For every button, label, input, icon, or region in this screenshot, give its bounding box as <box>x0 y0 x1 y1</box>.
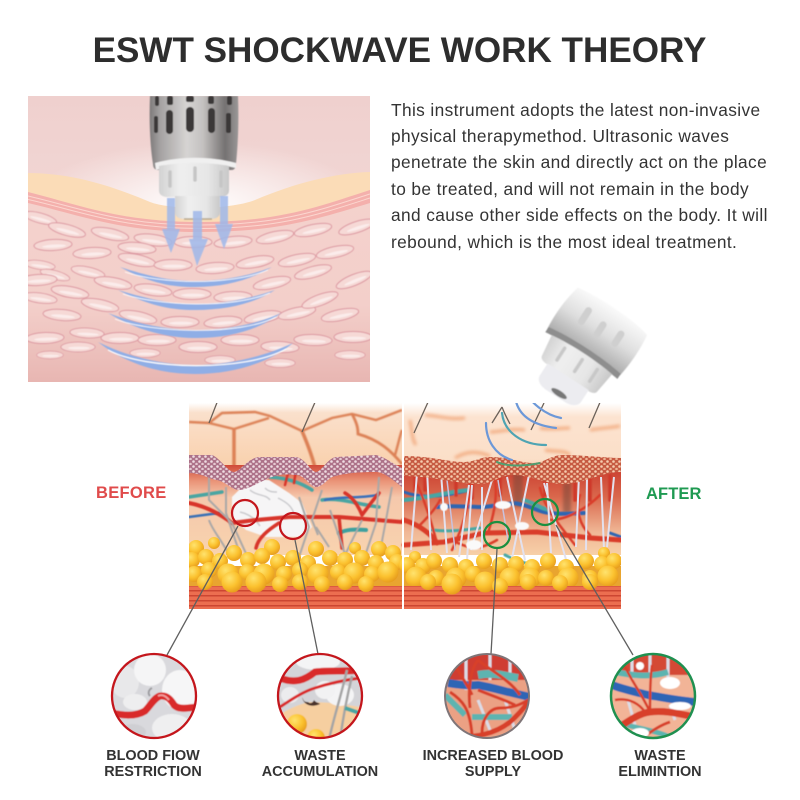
skin fat band <box>28 172 370 235</box>
left fibres <box>209 476 392 560</box>
vent slots <box>154 96 232 134</box>
right dermis background <box>404 465 621 555</box>
right skin surface <box>404 406 621 463</box>
callout leader lines <box>167 525 633 655</box>
thumbnail: waste accumulation <box>277 652 365 747</box>
description text: to be treated, and will not remain in the body <box>391 179 749 199</box>
thumbnail: increased blood supply <box>444 652 532 740</box>
left dermis background <box>189 465 402 555</box>
description text: physical therapymethod. Ultrasonic waves <box>391 126 729 146</box>
shockwave arcs <box>98 267 293 374</box>
description text <box>391 100 768 252</box>
probe head <box>150 96 238 219</box>
left veins teal and blue <box>189 477 379 533</box>
left arteries <box>189 470 402 548</box>
caption: waste accumulation <box>262 748 378 780</box>
panel: probe on skin illustration <box>19 96 377 382</box>
muscle layer <box>189 586 621 609</box>
callout marker: before circles <box>232 500 306 539</box>
panel background <box>189 403 621 609</box>
caption: blood flow restriction <box>104 748 202 780</box>
right vessels <box>404 473 621 565</box>
caption: waste elimintion: WASTE <box>634 748 686 764</box>
fat layer <box>184 537 622 590</box>
description text: This instrument adopts the latest non-invasive <box>391 100 761 120</box>
thumbnail: waste elimination <box>610 652 698 740</box>
skin cells <box>19 209 377 367</box>
caption: waste accumulation: ACCUMULATION <box>262 764 378 780</box>
dotted skin layers <box>189 455 402 490</box>
brown pigment patches <box>513 472 571 513</box>
hairs <box>209 400 601 433</box>
probe vent slots <box>575 306 627 350</box>
blue arrows <box>162 196 233 266</box>
panel: before and after skin cross-section <box>184 391 622 609</box>
caption: increased blood supply <box>423 748 563 780</box>
caption: waste accumulation: WASTE <box>294 748 346 764</box>
right fibres <box>411 470 614 563</box>
icon: angled shockwave probe <box>518 283 651 420</box>
caption: blood flow restriction: RESTRICTION <box>104 764 202 780</box>
left waste mass <box>232 479 312 537</box>
left skin surface <box>189 404 402 465</box>
label: after: AFTER <box>646 485 702 503</box>
centre divider <box>402 403 404 609</box>
thumbnail: blood flow restriction <box>110 652 198 742</box>
caption: increased blood supply: INCREASED BLOOD <box>423 748 563 764</box>
caption: waste elimintion: ELIMINTION <box>618 764 702 780</box>
caption: increased blood supply: SUPPLY <box>465 764 522 780</box>
description text: and cause other side effects on the body. It will <box>391 205 768 225</box>
description text: rebound, which is the most ideal treatment. <box>391 232 737 252</box>
title: ESWT SHOCKWAVE WORK THEORY <box>93 31 706 70</box>
description text: penetrate the skin and directly act on the place <box>391 152 767 172</box>
shockwave arcs on skin <box>484 403 562 466</box>
tissue layer <box>28 190 370 382</box>
caption: waste elimintion <box>618 748 702 780</box>
right waste remnants <box>440 501 529 550</box>
caption: blood flow restriction: BLOOD FIOW <box>106 748 200 764</box>
callout marker: after circles <box>484 499 558 548</box>
label: before: BEFORE <box>96 484 167 502</box>
